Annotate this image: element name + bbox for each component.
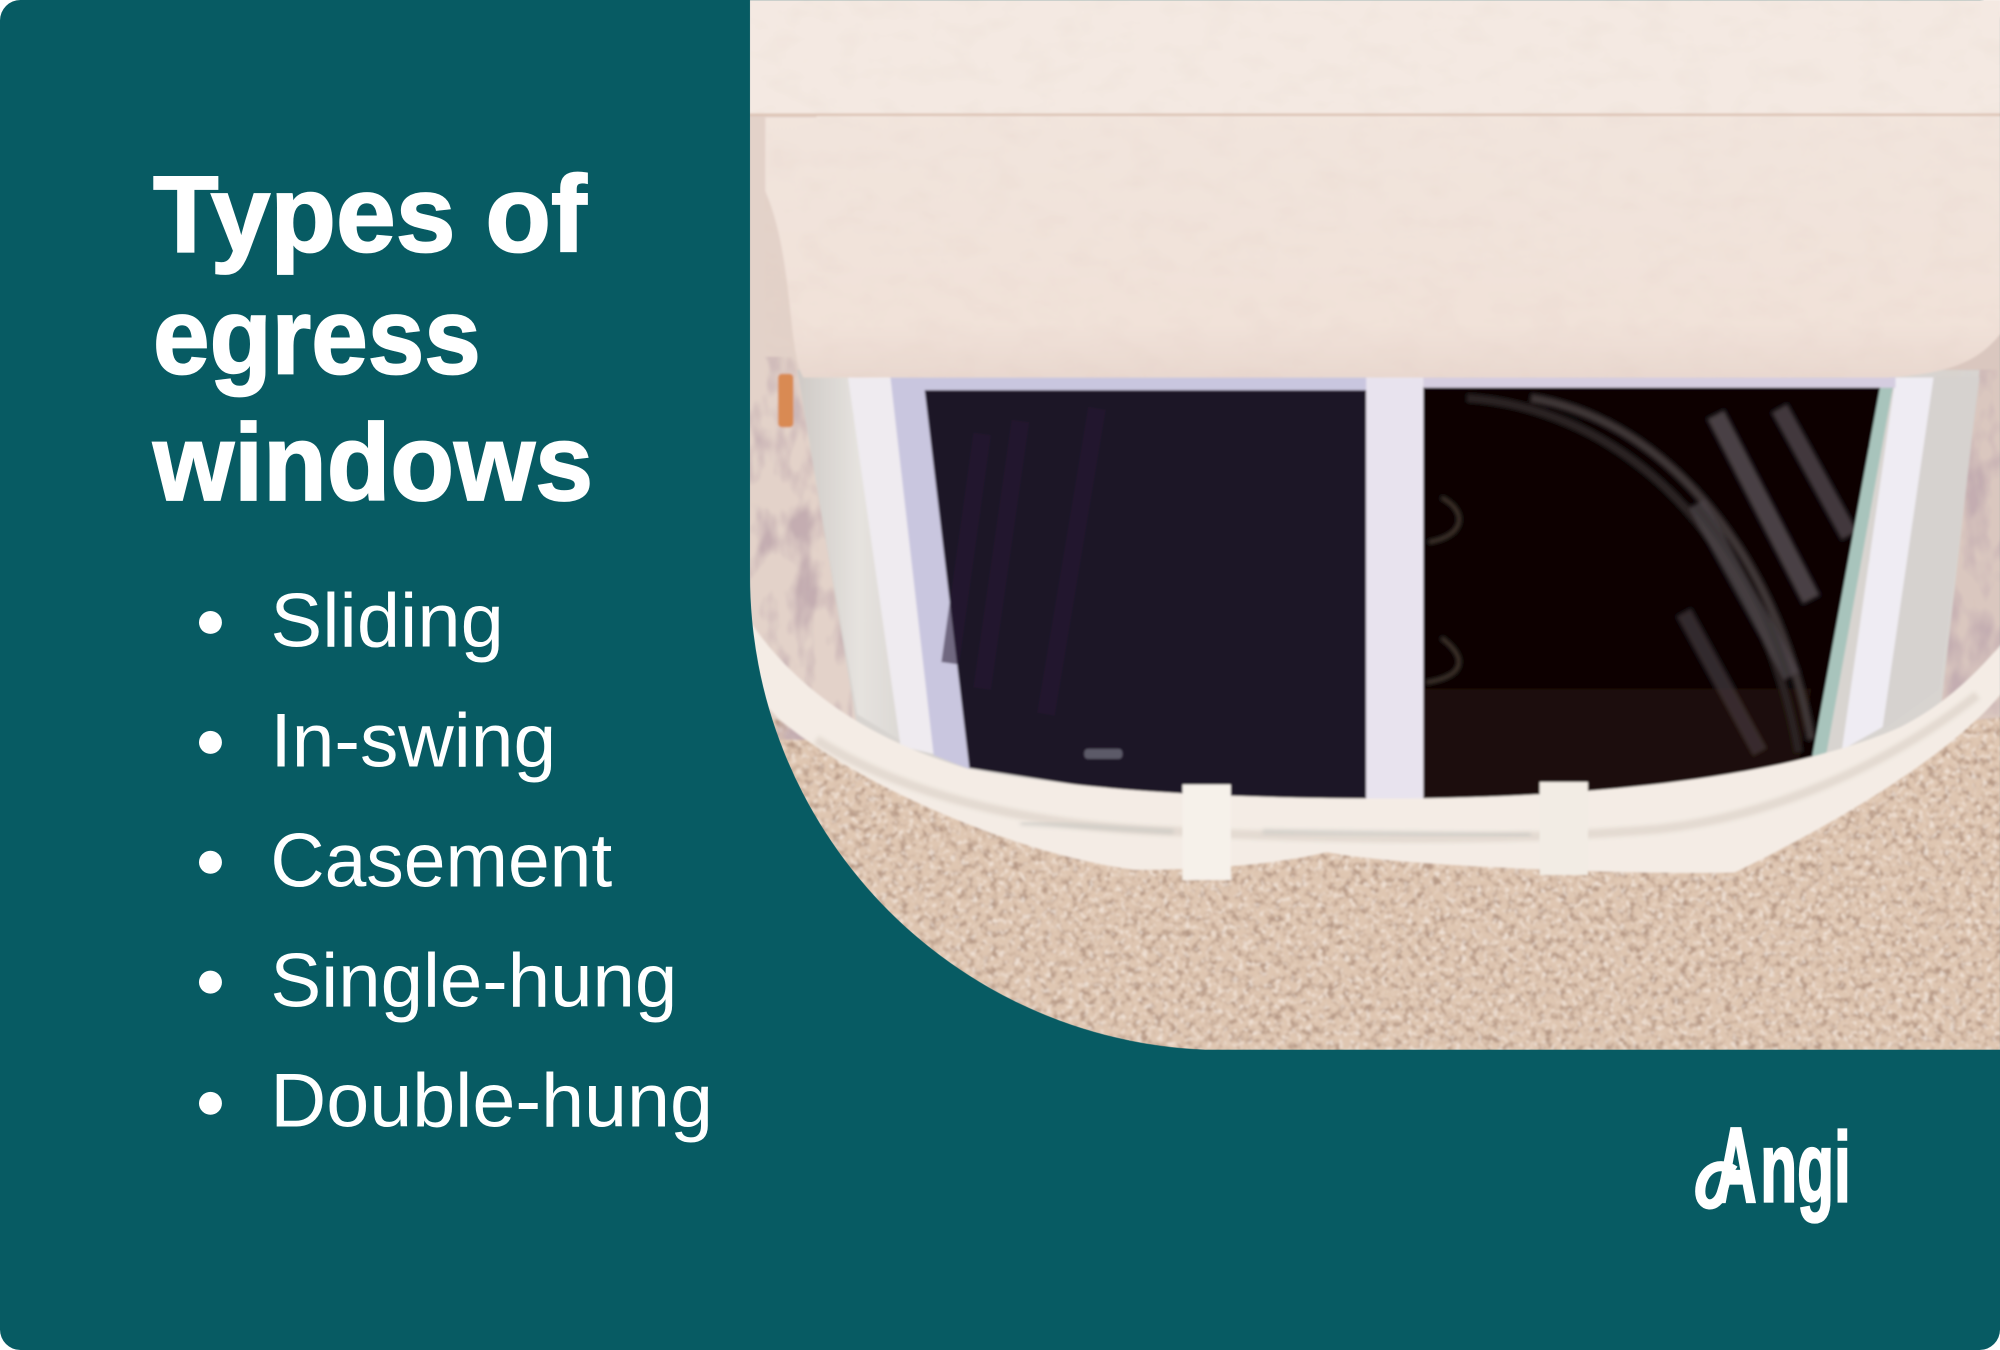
right pane lower glow (1422, 689, 1811, 801)
left white jamb (847, 370, 939, 755)
window well lip (752, 624, 2000, 874)
left pane glint (1084, 749, 1122, 759)
photo: egress window well (727, 0, 2000, 1084)
right white jamb (1842, 378, 1934, 750)
right pane tunnel ribs (1426, 398, 1849, 753)
title: windows (152, 402, 593, 523)
upper wall (750, 0, 2000, 120)
logo: Angi: A (1716, 1107, 1756, 1225)
wall ledge (765, 117, 2000, 378)
ledge seam line (727, 114, 2000, 116)
top right frame rail (1423, 376, 1895, 388)
left pane reflections (940, 603, 959, 666)
item: Casement: Casement (270, 818, 612, 903)
textured side walls (727, 115, 2000, 765)
left dark pane (925, 390, 1366, 801)
left lavender frame (890, 376, 1367, 769)
right well liner (1883, 378, 1980, 730)
orange tag on wall (778, 374, 793, 427)
ground gravel (771, 715, 2000, 1050)
logo: Angi (1700, 1107, 1851, 1225)
logo: Angi: ngi (1760, 1113, 1851, 1224)
right glass edge (1811, 386, 1893, 761)
item: Sliding: Sliding (270, 579, 504, 664)
item: Double-hung: Double-hung (270, 1058, 713, 1143)
title: egress (153, 276, 481, 397)
left well liner (799, 373, 885, 728)
item: Single-hung: Single-hung (270, 938, 677, 1023)
right dark pane (1422, 386, 1893, 801)
right bracket (1540, 782, 1588, 875)
title (152, 153, 593, 523)
list: window types (199, 579, 713, 1143)
window frame and panes (797, 370, 1980, 816)
left bracket (1182, 784, 1231, 880)
item: In-swing: In-swing (270, 699, 556, 784)
well base behind frame (840, 370, 1980, 784)
center mullion (1366, 376, 1423, 804)
title: Types of (153, 153, 588, 274)
